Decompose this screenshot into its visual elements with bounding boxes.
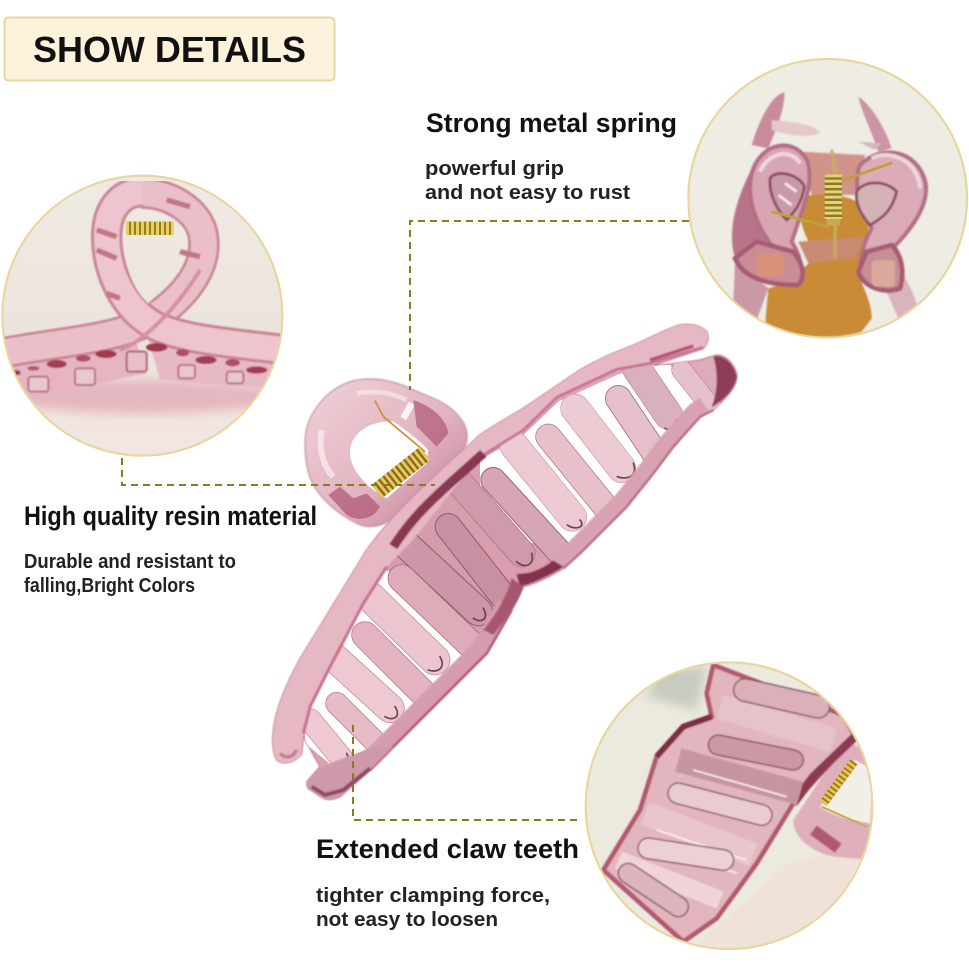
text block: extended claw teeth: tighter clamping force, xyxy=(316,885,550,907)
circle: resin material close-up xyxy=(0,176,287,456)
text block: extended claw teeth: not easy to loosen xyxy=(316,909,498,931)
bottom circle spring xyxy=(822,762,867,827)
left circle spring xyxy=(126,222,174,235)
main product: pink claw clip xyxy=(273,324,737,799)
text block: strong metal spring xyxy=(425,108,677,204)
right heart xyxy=(856,152,926,275)
left heart xyxy=(750,145,810,275)
teeth clipped to the claw silhouette xyxy=(305,365,713,767)
white windows between teeth, upper half xyxy=(480,365,694,544)
text block: resin material: falling,Bright Colors xyxy=(24,575,195,597)
text block: strong metal spring: powerful grip xyxy=(425,158,564,180)
ring segment xyxy=(792,744,872,860)
ring spring xyxy=(375,401,425,492)
text block: resin material xyxy=(24,501,317,597)
dashed leader: teeth xyxy=(353,725,581,820)
claw body silhouette xyxy=(273,324,737,799)
show details badge xyxy=(4,18,334,80)
teeth, upper half xyxy=(460,368,713,565)
teeth, lower half xyxy=(310,527,503,766)
text block: strong metal spring: and not easy to rust xyxy=(425,182,630,204)
text block: strong metal spring: Strong metal spring xyxy=(426,108,677,138)
text block: resin material: Durable and resistant to xyxy=(24,551,236,573)
dashed leader: spring xyxy=(410,221,689,390)
ring handle of the claw clip xyxy=(305,379,467,527)
text block: resin material: High quality resin material xyxy=(24,501,317,531)
show details badge: SHOW DETAILS xyxy=(33,29,306,70)
claw rim, lower edge and shading xyxy=(273,324,737,799)
white windows between teeth, lower half xyxy=(305,570,470,767)
text block: extended claw teeth xyxy=(316,834,579,931)
circle: claw teeth close-up xyxy=(586,662,880,953)
circle: metal spring close-up xyxy=(688,59,967,338)
right circle spring and wires xyxy=(772,163,892,227)
text block: extended claw teeth: Extended claw teeth xyxy=(316,834,579,864)
dashed leader: resin xyxy=(122,458,435,485)
